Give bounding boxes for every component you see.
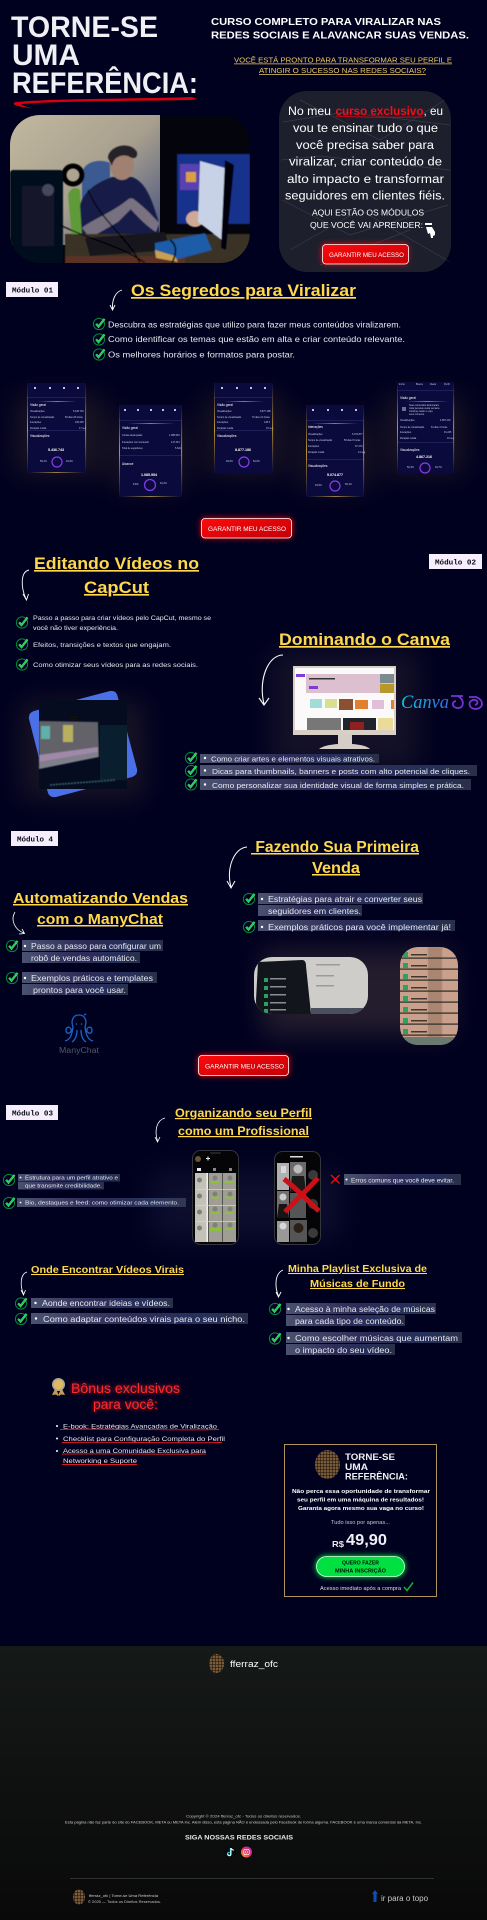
dashboard screenshot 1: Tempo de visualização [30,416,55,419]
dashboard screenshot 3: 52,0% [253,460,261,463]
footer credit: fferraz_ofc | Torne-se Uma Referência [89,1893,159,1898]
manychat list: robô de vendas automático. [31,954,137,963]
panel text: QUE VOCÊ VAI APRENDER: [310,220,423,230]
dashboard screenshot 3: Visualizações [217,434,237,438]
hero question [234,56,452,75]
panel text: você precisa saber para [296,140,435,152]
arrow [259,655,283,705]
dashboard screenshot 4: Tempo de visualização [308,439,333,442]
capcut list: Como otimizar seus vídeos para as redes sociais. [33,662,198,669]
capcut list [16,615,211,670]
module 1 list: Os melhores horários e formatos para postar. [108,350,295,360]
playlist list: Como escolher músicas que aumentam [295,1334,458,1343]
bonus list: Checklist para Configuração Completa do Perfil [63,1437,225,1443]
sales screenshots [254,947,458,1045]
dashboard screenshot 5: mais pessoas nesta semana. [409,407,440,410]
offer title: TORNE-SE [345,1452,395,1463]
dashboard screenshot 5: 4.867.216 [416,455,432,459]
dashboard screenshot 1: 50 dias 20 horas [65,416,83,419]
dashboard screenshot 3: Interações [217,421,229,424]
dashboard screenshot 3: Visão geral [217,403,233,407]
heading: automatizando vendas: com o ManyChat [37,911,163,928]
module tag 03: Módulo 03 [12,1110,53,1118]
arrow [276,1270,283,1297]
access note: Acesso imediato após a compra [320,1586,401,1592]
offer title: REFERÊNCIA: [345,1470,408,1482]
dashboard screenshot 1: Visão geral [30,403,46,407]
dashboard screenshot 5: Perfil [444,383,450,386]
dashboard screenshot 4 [306,405,366,497]
heading: os segredos: Os Segredos para Viralizar [131,281,356,300]
panel text: vou te ensinar tudo o que [293,123,438,135]
phone: organized profile [192,1150,238,1244]
offer box: Tudo isso por apenas... [331,1520,390,1526]
hero title: TORNE-SE [11,11,158,44]
dashboard screenshot 4: Duração média [308,451,325,454]
button: garantir acesso: GARANTIR MEU ACESSO [205,1064,284,1070]
dashboard screenshot 1: 5.436.743 [73,410,84,413]
dashboard screenshot 1: Duração média [30,427,47,430]
photo man [80,177,160,240]
icon: tiktok [224,1846,236,1858]
phone: wrong profile [274,1152,320,1244]
dashboard screenshot 1 [27,383,87,473]
dashboard screenshot 5: Busca [416,383,423,386]
heading: organizando perfil [175,1106,312,1138]
access note [320,1582,413,1592]
virais list [15,1298,248,1325]
dashboard screenshot 4: Interações [308,445,320,448]
dashboard screenshot 4: 50,1% [345,483,353,486]
blue tilted card [29,691,137,797]
dashboard screenshot 2 [119,405,182,497]
price: R$ [332,1539,344,1549]
primeira venda list: Exemplos práticos para você implementar já! [268,923,451,932]
photo plush [186,211,204,227]
dashboard screenshot 3: 8.877.186 [260,410,271,413]
canva logo [401,692,482,713]
photo ring light [64,166,82,184]
hero photo [10,115,250,264]
playlist list [269,1303,462,1355]
offer text [292,1489,431,1512]
perfil list: Estrutura para um perfil atrativo e [25,1176,118,1182]
arrow [21,1272,27,1295]
heading: primeira venda: Venda [312,860,360,877]
footer profile [209,1654,279,1673]
dashboard screenshot 2: Interações com conteúdo [122,441,150,444]
button: garantir acesso: GARANTIR MEU ACESSO [329,252,404,259]
footer credit: © 2025 — Todos os Direitos Reservados. [88,1899,161,1904]
dashboard screenshot 2: Contas alcançadas [122,434,143,437]
dashboard screenshot 3: Duração média [217,427,234,430]
panel text: seguidores em clientes fiéis. [285,190,445,202]
dashboard screenshot 2: Visão geral [122,426,138,430]
canva list: Como personalizar sua identidade visual de forma simples e prática. [212,781,464,790]
dashboard screenshot 2: 147.344 [171,441,180,444]
social heading: SIGA NOSSAS REDES SOCIAIS [185,1834,294,1842]
arrow [110,290,122,310]
dashboard screenshot 1: Visualizações [30,434,50,438]
red x icon [331,1175,340,1184]
heading: dominando canva: Dominando o Canva [279,630,451,649]
footer profile: fferraz_ofc [230,1659,279,1669]
panel text: AQUI ESTÃO OS MÓDULOS [312,208,424,218]
button: inscrição: MINHA INSCRIÇÃO [335,1568,386,1574]
heading: playlist: Minha Playlist Exclusiva de [288,1263,427,1275]
playlist list: Acesso à minha seleção de músicas [295,1305,435,1314]
canva logo: Canva [401,692,449,713]
module 1 list: Descubra as estratégias que utilizo para fazer meus conteúdos viralizarem. [108,320,401,330]
footer credit [73,1890,161,1904]
dashboard screenshot 3: Visualizações [217,410,232,413]
heading: editando videos: Editando Vídeos no [34,555,199,573]
hero title [11,11,198,108]
offer text: Não perca essa oportunidade de transformar [292,1489,431,1495]
module 1 list [93,318,405,360]
copyright: Copyright © 2024 fferraz_ofc - Todos os direitos reservados. [186,1814,301,1818]
panel text: curso exclusivo [336,106,424,118]
heading: playlist: Músicas de Fundo [310,1278,405,1290]
hero subtitle: CURSO COMPLETO PARA VIRALIZAR NAS [211,16,441,28]
capcut list: você não tiver experiência. [33,625,118,632]
dashboard screenshot 1: 17 seg [79,427,87,430]
price: 49,90 [346,1532,387,1549]
manychat list: Exemplos práticos e templates [31,974,153,983]
button: garantir acesso [198,1055,289,1076]
copyright [65,1814,422,1824]
arrow [22,570,29,600]
bonus heading: Bônus exclusivos [71,1380,180,1396]
heading: organizando perfil: Organizando seu Perfil [175,1106,312,1120]
dashboard screenshot 5: 16 seg [447,437,455,440]
virais list: Como adaptar conteúdos virais para o seu nicho. [43,1314,245,1324]
icon: brain [315,1450,340,1479]
manychat list [6,940,163,995]
dashboard screenshot 5: 49,7% [435,466,443,469]
module tag 01: Módulo 01 [12,288,53,296]
dashboard screenshot 2: 8,8% [133,483,139,486]
button: inscrição [316,1556,405,1577]
photo chair [68,188,82,236]
icon: instagram [241,1846,252,1858]
heading: organizando perfil: como um Profissional [178,1124,309,1138]
dashboard screenshot 3 [214,383,274,473]
dashboard screenshot 2: 5.624 [175,447,182,450]
module tag 02 [429,554,482,569]
dashboard screenshot 5: Visão geral [400,396,416,400]
dashboard screenshot 5: Seus conteúdos alcançaram [409,404,439,407]
icon: pointing hand [425,223,435,238]
dashboard screenshot 1: Interações [30,421,42,424]
dashboard screenshot 1: 105.245 [75,421,84,424]
bonus heading: para você: [93,1396,158,1412]
back to top link: ir para o topo [381,1894,429,1903]
bonus list: Acesso a uma Comunidade Exclusiva para [63,1449,207,1455]
screenshot: desktop [254,957,368,1014]
arrow [155,1118,165,1142]
dashboard screenshot 4: Visualizações [308,464,328,468]
offer title [345,1452,408,1482]
perfil list: Bio, destaques e feed: como otimizar cada elemento. [25,1200,180,1206]
module 1 list: Como identificar os temas que estão em alta e criar conteúdo relevante. [108,335,405,344]
module tag 4: Módulo 4 [17,836,53,844]
dashboard screenshot 4: 5.074.877 [327,473,343,477]
perfil list [3,1174,186,1209]
hero panel [279,91,451,272]
dashboard screenshot 5: 4.867.216 [440,419,451,422]
capcut list: Efeitos, transições e textos que engajam. [33,642,171,649]
dashboard screenshot 4: 58 dias 8 horas [344,439,361,442]
dashboard screenshot 1: 40,9% [66,460,74,463]
capcut image [20,691,145,800]
dashboard screenshot 3: 8.877.186 [235,448,251,452]
dashboard screenshot 4: Visualizações [308,433,323,436]
heading: primeira venda [251,839,419,877]
dashboard screenshot 5: Duração média [400,437,417,440]
heading: automatizando vendas: Automatizando Vendas [13,890,188,907]
photo desk [65,234,250,264]
module tag 03 [6,1105,58,1120]
offer text: Garanta agora mesmo sua vaga no curso! [298,1506,424,1512]
dashboard screenshot 4: 49,9% [315,484,323,487]
offer box [284,1444,436,1596]
back to top link [372,1890,429,1903]
canva list: Dicas para thumbnails, banners e posts com alto potencial de cliques. [212,767,470,776]
dashboard screenshot 4: 97.470 [355,445,363,448]
dashboard screenshot 2: Alcance [122,462,134,466]
hero question: VOCÊ ESTÁ PRONTO PARA TRANSFORMAR SEU PERFIL E [234,56,452,64]
panel text: alto impacto e transformar [287,174,444,186]
dashboard screenshot 5: Visualizações [400,448,420,452]
error note: Erros comuns que você deve evitar. [351,1178,454,1184]
copyright: Esta página não faz parte do site do FACEBOOK, META ou META Inc. Além disso, esta página NÃO é endossada pelo Facebook de forma alguma. FACEBOOK é uma marca comercial da META, Inc. [65,1820,422,1824]
hero subtitle [211,16,469,42]
hero question: ATINGIR O SUCESSO NAS REDES SOCIAIS? [259,66,426,75]
photo books [155,233,212,260]
canva monitor [270,650,420,770]
heading: playlist [288,1263,427,1290]
dashboard screenshot 4: 14 seg [358,451,366,454]
panel text: viralizar, criar conteúdo de [289,156,442,168]
perfil list: que transmite credibilidade. [25,1184,103,1190]
dashboard screenshot 1: 5.436.743 [48,448,64,452]
phone glow [150,1170,340,1240]
button: inscrição: QUERO FAZER [342,1560,379,1566]
photo pc tower [10,170,63,263]
dashboard screenshot 5: 61 dias 3 horas [431,426,448,429]
dashboard screenshot 4: Interações [308,425,323,429]
dashboard screenshot 5: Reels [430,383,437,386]
photo laptop [198,161,225,240]
capcut list: Passo a passo para criar vídeos pelo CapCut, mesmo se [33,615,211,622]
bonus list: Networking e Suporte [63,1459,138,1465]
hero title: UMA [12,39,80,72]
manychat logo: ManyChat [59,1046,100,1055]
button: garantir acesso [322,244,408,264]
dashboard screenshot 5: Continue assim e veja [409,410,433,413]
swirl icons [451,696,482,709]
dashboard screenshot 3: 48,0% [226,460,234,463]
heading: automatizando vendas [13,890,188,928]
manychat list: Passo a passo para configurar um [31,942,161,951]
panel text: , eu [424,106,443,118]
primeira venda list [243,893,455,933]
bonus list: E-book: Estratégias Avançadas de Viralização [63,1424,218,1430]
bonus list [56,1424,225,1465]
heading: videos virais: Onde Encontrar Vídeos Virais [31,1264,184,1276]
panel text: No meu [288,106,331,118]
dashboard screenshot 5: Tempo de visualização [400,426,425,429]
module tag 01 [6,282,58,297]
bonus heading [71,1380,180,1412]
footer [0,1646,487,1920]
offer text: seu perfil em uma máquina de resultados! [297,1498,424,1504]
arrow [227,847,247,888]
error note [331,1174,461,1185]
dashboard screenshot 4: 5.074.877 [352,433,363,436]
dashboard screenshot 5: 50,3% [407,466,415,469]
module tag 02: Módulo 02 [435,560,476,568]
dashboard screenshot 5: Visualizações [400,419,415,422]
primeira venda list: seguidores em clientes. [268,907,361,916]
red brush underline [14,97,197,108]
heading: editando videos [34,555,199,597]
panel text [285,106,445,230]
dashboard screenshot 2: 1.085.954 [141,473,157,477]
module tag 4 [11,831,58,846]
dashboard screenshot 1: Visualizações [30,410,45,413]
dashboard screenshot 3: 15 seg [266,427,274,430]
manychat logo [59,1014,100,1055]
dashboard screenshot 2: 1.085.954 [169,434,180,437]
dashboard screenshot 3: 148.3 [264,421,271,424]
playlist list: para cada tipo de conteúdo. [295,1317,404,1326]
heading: primeira venda: Fazendo Sua Primeira [251,839,419,856]
offer title: UMA [345,1462,368,1473]
photo monitor [177,154,250,224]
canva list: Como criar artes e elementos visuais atrativos. [211,754,375,764]
hero subtitle: REDES SOCIAIS E ALAVANCAR SUAS VENDAS. [211,30,469,42]
dashboard screenshot 2: 91,2% [160,482,168,485]
dashboard screenshot 5: Interações [400,431,412,434]
button: garantir acesso: GARANTIR MEU ACESSO [208,526,286,533]
dashboard screenshot 3: Tempo de visualização [217,416,242,419]
dashboard screenshot 1: 59,1% [40,460,48,463]
playlist list: o impacto do seu vídeo. [295,1346,392,1355]
arrow [13,912,24,934]
dashboard screenshot 5: Início [399,383,405,386]
dashboard screenshot 5: seus números. [409,413,425,416]
dashboard screenshot 3: 70 dias 21 horas [252,416,270,419]
icon: medal [52,1378,65,1396]
dashboard screenshot 2: Total de seguidores [122,447,144,450]
dashboard screenshot 5: 91.245 [444,431,452,434]
dashboard screenshot 5 [397,382,455,473]
hero title: REFERÊNCIA: [12,66,198,100]
screenshot: notifications [400,947,458,1045]
canva list [185,752,477,790]
primeira venda list: Estratégias para atrair e converter seus [268,895,422,904]
red x stamp [284,1178,319,1212]
dashboard glow [15,395,465,490]
button: garantir acesso [201,518,292,538]
heading: editando videos: CapCut [84,579,150,597]
virais list: Aonde encontrar ideias e vídeos. [42,1299,170,1308]
manychat list: prontos para você usar. [33,986,126,995]
